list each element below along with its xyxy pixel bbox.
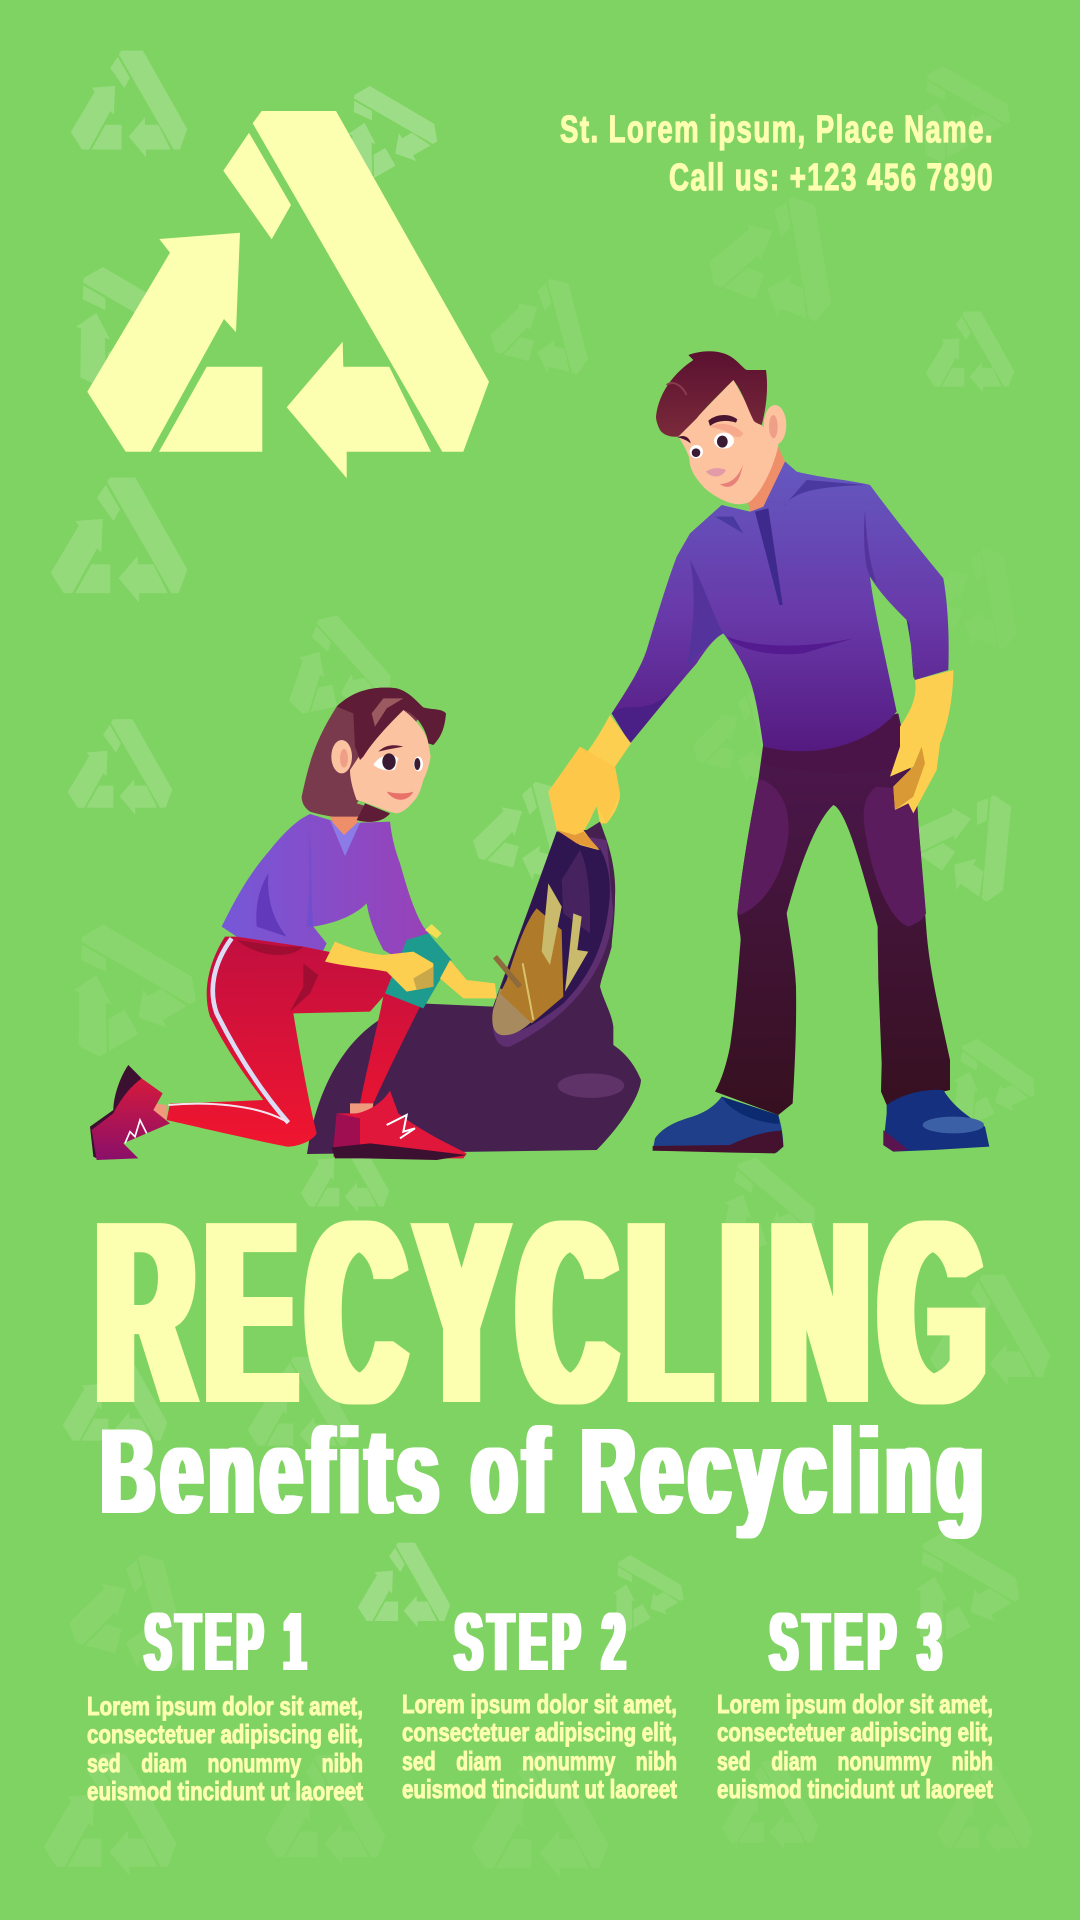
illustration: man	[548, 351, 989, 1153]
woman bottle and gloves	[425, 924, 442, 938]
step 3 text: sed diam nonummy nibh	[717, 1746, 993, 1776]
step 2 text: Lorem ipsum dolor sit amet,	[402, 1689, 677, 1719]
woman shoes	[90, 1065, 142, 1158]
step 1 text: sed diam nonummy nibh	[87, 1748, 363, 1778]
step 2 text: euismod tincidunt ut laoreet	[402, 1774, 677, 1804]
illustration: woman	[90, 688, 497, 1160]
step 3 text: consectetuer adipiscing elit,	[717, 1717, 993, 1747]
man torso and head	[548, 351, 953, 843]
step 3 text: Lorem ipsum dolor sit amet,	[717, 1689, 993, 1719]
contact text	[560, 109, 994, 199]
step 1 text: Lorem ipsum dolor sit amet,	[87, 1691, 363, 1721]
step headings	[145, 1595, 947, 1688]
man legs	[653, 713, 989, 1153]
step 1 text	[87, 1691, 363, 1806]
woman hair	[302, 688, 423, 822]
step headings: STEP 1	[145, 1595, 311, 1688]
step 3 text	[717, 1689, 993, 1804]
step 1 text: euismod tincidunt ut laoreet	[87, 1776, 363, 1806]
woman sweater	[222, 814, 450, 975]
woman face	[331, 740, 352, 773]
woman trousers	[167, 937, 427, 1147]
illustration: trash bag	[307, 747, 641, 1154]
icon: main recycling symbol	[87, 111, 489, 478]
step 2 text: consectetuer adipiscing elit,	[402, 1717, 677, 1747]
step 2 text	[402, 1689, 677, 1804]
step 2 text: sed diam nonummy nibh	[402, 1746, 677, 1776]
step headings: STEP 2	[455, 1595, 631, 1688]
step 3 text: euismod tincidunt ut laoreet	[717, 1774, 993, 1804]
step 1 text: consectetuer adipiscing elit,	[87, 1719, 363, 1749]
